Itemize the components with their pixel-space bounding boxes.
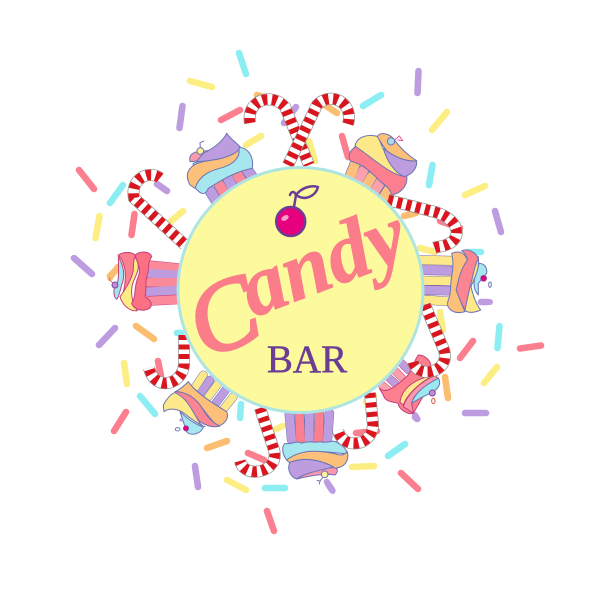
- candy cane: bottom right: [338, 393, 373, 443]
- icon: cherry: [276, 186, 318, 236]
- title: Candy: andy: [226, 187, 419, 335]
- central yellow circle: [178, 168, 423, 412]
- cupcake: bottom: [283, 413, 348, 491]
- candy cane: lower left: [149, 335, 184, 383]
- cupcake: top left: [187, 133, 257, 207]
- cupcake: top right: [349, 134, 417, 203]
- subtitle: BAR: BAR: [267, 338, 347, 381]
- candy cane: top crossing left: [250, 99, 309, 165]
- candy cane: lower right: [413, 305, 445, 372]
- cupcake: bottom left: [163, 375, 233, 434]
- cupcake: right: [418, 250, 491, 313]
- cupcake: bottom right: [379, 355, 440, 419]
- candy cane: bottom left: [240, 408, 275, 472]
- candy cane: right: [388, 200, 457, 248]
- candy cane: top crossing right: [288, 99, 349, 165]
- title: Candy: C: [172, 252, 275, 380]
- sprinkles: [74, 53, 541, 531]
- candy cane: left: [133, 175, 185, 245]
- cupcake: left: [109, 252, 180, 311]
